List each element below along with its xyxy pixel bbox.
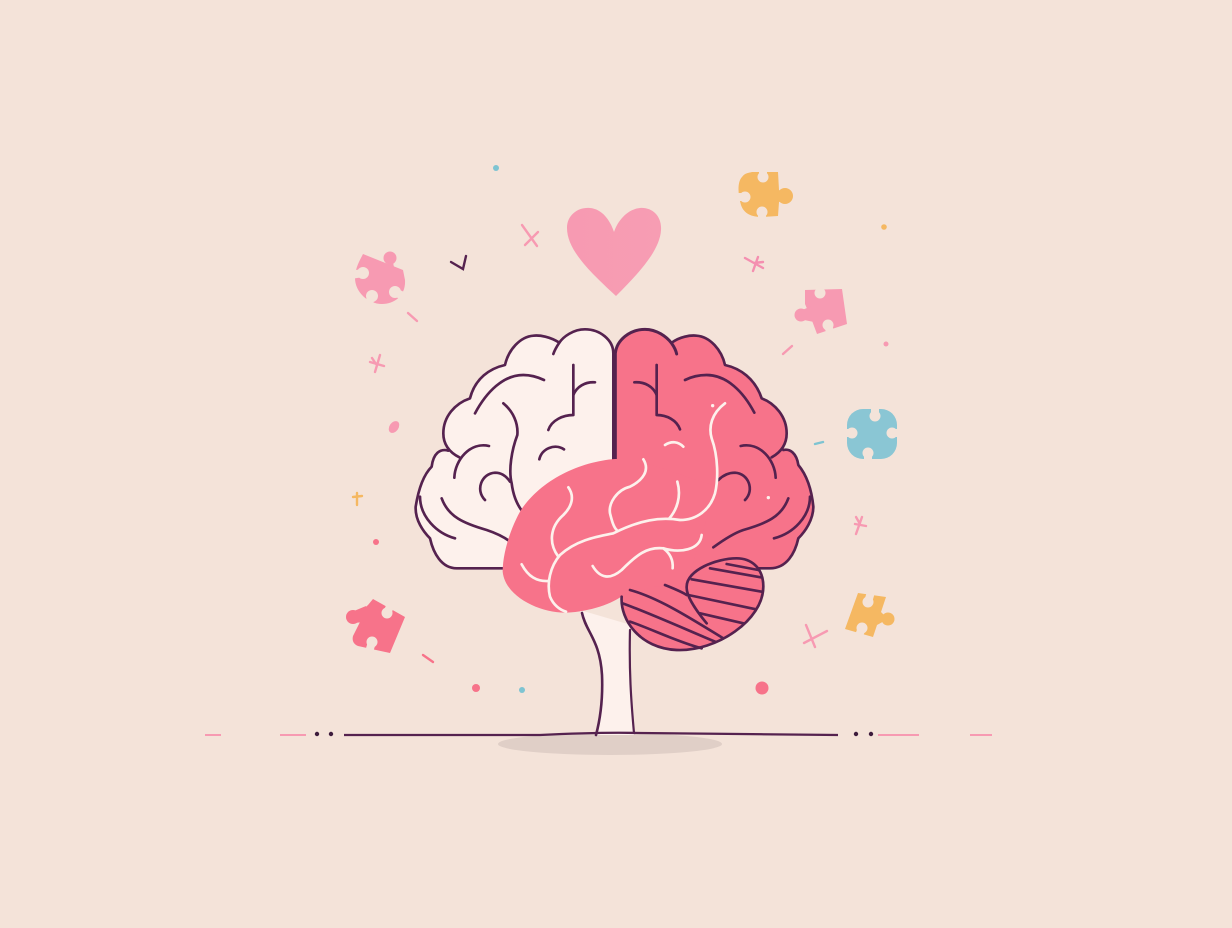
- pink dash right: [783, 346, 792, 354]
- temporal lobe: [503, 459, 717, 613]
- blue dash: [815, 442, 823, 444]
- ground shadow: [498, 733, 722, 755]
- cerebellum: [622, 558, 763, 650]
- pink asterisk top right: [745, 257, 763, 271]
- puzzle piece: pink right: [794, 285, 847, 335]
- check mark: [451, 256, 466, 269]
- white fold lines: [522, 403, 770, 612]
- pink dash left: [408, 313, 417, 321]
- ground line: [205, 732, 992, 736]
- puzzle piece: pink left: [350, 252, 409, 309]
- pink cross bottom right: [804, 625, 827, 647]
- puzzle piece: red: [346, 599, 405, 653]
- brain stem: [580, 610, 634, 735]
- artwork: [205, 165, 992, 755]
- right hemisphere: [613, 329, 813, 597]
- puzzle piece: orange bottom: [845, 592, 894, 638]
- small decorative marks: [353, 225, 866, 662]
- pink star left: [370, 355, 384, 372]
- orange plus: [353, 493, 362, 505]
- scattered dots: [373, 165, 888, 694]
- pink star right: [855, 517, 866, 534]
- brain: [416, 329, 813, 650]
- left hemisphere: [416, 329, 613, 568]
- puzzle piece: blue: [843, 405, 901, 463]
- pink cross top: [522, 225, 538, 246]
- heart: [567, 208, 661, 296]
- puzzle piece: orange top: [734, 168, 793, 221]
- red dash: [423, 655, 433, 662]
